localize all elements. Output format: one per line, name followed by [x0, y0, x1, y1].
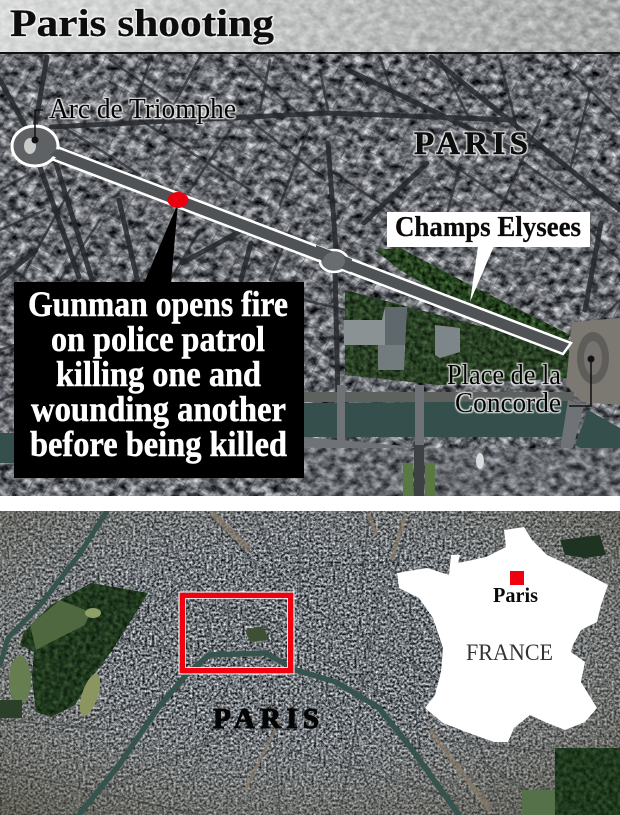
bridges	[304, 385, 584, 448]
callout box: before being killed	[30, 424, 287, 464]
label: Champs Elysees: Champs Elysees	[395, 212, 581, 243]
callout box	[14, 282, 304, 478]
gardens north-east	[560, 535, 606, 558]
callout box: on police patrol	[51, 319, 265, 359]
location box	[179, 592, 294, 674]
label: Place de la Concorde: Concorde	[455, 388, 561, 419]
France map	[397, 527, 608, 742]
Champs Elysees route line	[12, 126, 571, 354]
label: Arc de Triomphe: Arc de Triomphe	[49, 94, 236, 125]
Petit Palais	[435, 325, 460, 358]
Paris label: Paris	[493, 583, 538, 607]
river Seine	[0, 401, 620, 463]
header band	[0, 0, 620, 52]
FRANCE label: FRANCE	[466, 640, 553, 665]
pointer from red marker to callout	[144, 203, 178, 283]
label: Place de la Concorde: Place de la	[447, 360, 562, 391]
red incident marker	[168, 192, 188, 208]
Seine river	[0, 511, 459, 815]
label: Champs Elysees	[387, 212, 590, 302]
callout box: wounding another	[31, 389, 286, 429]
city streets	[0, 514, 555, 815]
Rond-point circle	[320, 250, 348, 272]
Arc de Triomphe circle	[12, 126, 58, 166]
callout box: killing one and	[56, 354, 261, 394]
label: Place de la Concorde	[447, 356, 594, 419]
Grand Palais	[344, 307, 407, 370]
Bois de Boulogne	[0, 580, 150, 720]
street network	[0, 57, 620, 400]
gardens south-east	[555, 748, 620, 815]
tan rail and road corridors	[212, 513, 490, 810]
Paris marker	[510, 571, 524, 585]
callout box: Gunman opens fire	[28, 284, 288, 324]
Place de la Concorde	[566, 318, 620, 405]
label: PARIS: PARIS	[414, 126, 528, 162]
panel: satellite map of Paris	[0, 511, 620, 815]
label: Arc de Triomphe	[32, 94, 236, 144]
south bank	[304, 448, 620, 496]
title: Paris shooting	[10, 2, 275, 45]
label: PARIS: PARIS	[213, 703, 319, 735]
road along the quay	[304, 392, 574, 402]
small park inside the location box	[245, 626, 270, 642]
panel: aerial map of the Champs Elysees	[0, 54, 620, 496]
gardens of the Champs Elysees	[375, 248, 570, 345]
